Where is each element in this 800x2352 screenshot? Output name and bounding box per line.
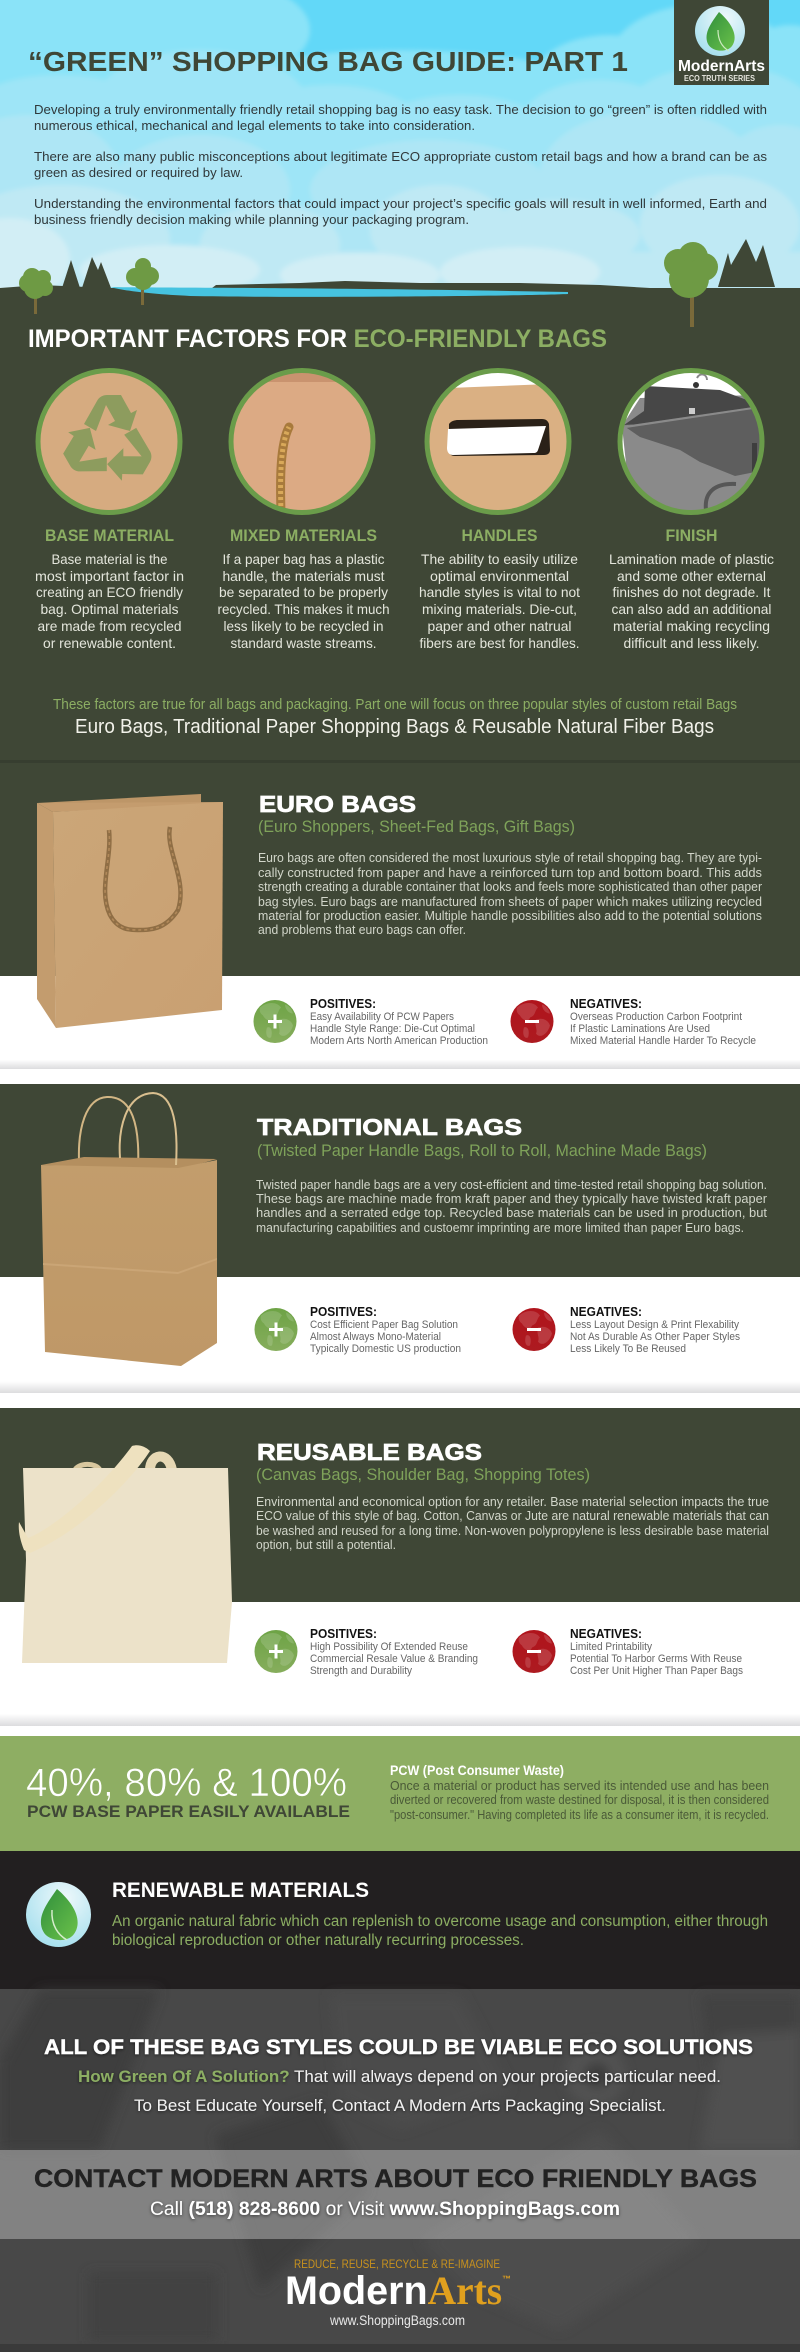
negatives list: Cost Per Unit Higher Than Paper Bags [570, 1665, 743, 1677]
PCW definition: diverted or recovered from waste destined for disposal, it is then considered [390, 1793, 769, 1807]
body text: recycled. This makes it much [218, 602, 390, 617]
positives list [310, 1627, 478, 1677]
body text: and problems that euro bags can offer. [258, 923, 466, 937]
body text: These bags are machine made from kraft paper and they typically have twisted kraft paper [256, 1192, 767, 1206]
contact band [0, 2150, 800, 2239]
body text: manufacturing capabilities and custoemr imprinting are more limited than paper Euro bags. [256, 1221, 744, 1235]
positives list: Commercial Resale Value & Branding [310, 1653, 478, 1665]
icon: rope handle on paper bag [234, 373, 370, 510]
negatives list: NEGATIVES: [570, 1627, 642, 1641]
negatives list: Mixed Material Handle Harder To Recycle [570, 1035, 756, 1047]
body text: If a paper bag has a plastic [222, 552, 385, 567]
subtitle: (Euro Shoppers, Sheet-Fed Bags, Gift Bags) [258, 817, 575, 836]
PCW definition [390, 1762, 769, 1822]
icon: leaf [26, 1882, 91, 1947]
negatives list: If Plastic Laminations Are Used [570, 1023, 710, 1035]
body text: bag. Optimal materials [40, 602, 179, 617]
negatives list: Less Layout Design & Print Flexability [570, 1319, 739, 1331]
body text: biological reproduction or other naturally recurring processes. [112, 1932, 524, 1949]
logo: Modern Arts wordmark: ™ [502, 2274, 511, 2284]
heading: important factors: IMPORTANT FACTORS FOR ECO-FRIENDLY BAGS [28, 325, 607, 353]
body text: bag styles. Euro bags are manufactured from sheets of paper which makes utilizing recycled [258, 895, 762, 909]
positives list: Handle Style Range: Die-Cut Optimal [310, 1023, 475, 1035]
positives list: Modern Arts North American Production [310, 1035, 488, 1047]
intro text: numerous ethical, mechanical and legal elements to take into consideration. [34, 118, 475, 133]
intro text: There are also many public misconceptions about legitimate ECO appropriate custom retail bags and how a brand can be as [34, 149, 768, 164]
heading: RENEWABLE MATERIALS [112, 1879, 369, 1902]
body text [35, 552, 184, 651]
panel: finish [609, 370, 774, 651]
panel: base material [35, 370, 184, 651]
panel: reusable bags [0, 1408, 800, 1726]
icon: positives globe [254, 1630, 298, 1673]
body text: material for production easier. Multiple handle possibilities also add to the potential solutions [258, 909, 762, 923]
heading: EURO BAGS [259, 791, 416, 817]
callout: viable eco solutions: How Green Of A Solution? That will always depend on your projects particular need. [78, 2067, 721, 2086]
positives list [310, 1305, 461, 1355]
positives list: POSITIVES: [310, 1305, 377, 1319]
footer logo block [285, 2257, 511, 2328]
body text: material making recycling [613, 619, 770, 634]
intro text [34, 102, 768, 227]
body text [258, 851, 762, 937]
logo badge: Modern Arts eco truth series: ModernArts [678, 58, 765, 75]
body text: handle, the materials must [222, 569, 385, 584]
heading: MIXED MATERIALS [230, 526, 377, 545]
icon: laminated bag finish [622, 373, 760, 510]
stat: PCW percentages: 40%, 80% & 100% [26, 1761, 347, 1805]
PCW definition: Once a material or product has served its intended use and has been [390, 1779, 769, 1793]
body text: strength creating a durable container that looks and feels more sophisticated than other paper [258, 880, 762, 894]
logo badge: Modern Arts eco truth series [674, 0, 769, 85]
negatives list [570, 997, 756, 1047]
positives list: POSITIVES: [310, 1627, 377, 1641]
icon: positives globe [254, 1308, 298, 1351]
body text: Base material is the [52, 552, 168, 567]
body text [609, 552, 774, 651]
body text: standard waste streams. [230, 636, 376, 651]
negatives list: NEGATIVES: [570, 1305, 642, 1319]
body text: or renewable content. [43, 636, 176, 651]
negatives list [570, 1627, 743, 1677]
heading: HANDLES [462, 526, 538, 545]
negatives list: Less Likely To Be Reused [570, 1343, 686, 1355]
panel: PCW post consumer waste [0, 1736, 800, 1851]
body text: handle styles is vital to not [419, 585, 580, 600]
subtitle: (Twisted Paper Handle Bags, Roll to Roll, Machine Made Bags) [257, 1141, 707, 1160]
panel: footer photo background [0, 1989, 800, 2352]
body text [419, 552, 580, 651]
callout: scope of part one: These factors are true for all bags and packaging. Part one will focus on three popular styles of custom retail Bags [53, 697, 737, 713]
panel: euro bags [0, 760, 800, 1069]
body text: be washed and reused for a long time. Non-woven polypropylene is less desirable base material [256, 1524, 769, 1538]
bottom strip [0, 2344, 800, 2352]
body text [256, 1178, 768, 1235]
body text [256, 1495, 769, 1552]
body text: An organic natural fabric which can replenish to overcome usage and consumption, either through [112, 1913, 768, 1930]
body text: cally constructed from paper and have a reinforced turn top and bottom board. This adds [258, 866, 762, 880]
body text [218, 552, 390, 651]
callout: viable eco solutions [44, 2036, 753, 2115]
body text: ECO value of this style of bag. Cotton, Canvas or Jute are natural renewable materials that can [256, 1509, 769, 1523]
body text: most important factor in [35, 569, 184, 584]
positives list: Easy Availability Of PCW Papers [310, 1011, 454, 1023]
negatives list: Potential To Harbor Germs With Reuse [570, 1653, 742, 1665]
positives list: High Possibility Of Extended Reuse [310, 1641, 468, 1653]
body text: finishes do not degrade. It [612, 585, 771, 600]
contact details: Call (518) 828-8600 or Visit www.ShoppingBags.com [150, 2199, 620, 2220]
body text: Lamination made of plastic [609, 552, 774, 567]
body text: fibers are best for handles. [420, 636, 580, 651]
icon: negatives globe [510, 1000, 554, 1043]
heading: REUSABLE BAGS [257, 1439, 482, 1465]
logo badge: Modern Arts eco truth series: ECO TRUTH SERIES [684, 74, 756, 83]
PCW definition: PCW (Post Consumer Waste) [390, 1762, 564, 1778]
body text: The ability to easily utilize [421, 552, 578, 567]
positives list: Cost Efficient Paper Bag Solution [310, 1319, 458, 1331]
body text: less likely to be recycled in [224, 619, 384, 634]
body text: be separated to be properly [219, 585, 388, 600]
positives list: POSITIVES: [310, 997, 376, 1011]
panel: renewable materials [0, 1851, 800, 1989]
heading: TRADITIONAL BAGS [257, 1114, 522, 1140]
intro text: green as desired or required by law. [34, 165, 243, 180]
website: www.ShoppingBags.com [329, 2313, 465, 2328]
body text: can also add an additional [612, 602, 772, 617]
body text: are made from recycled [38, 619, 182, 634]
callout: scope of part one: Euro Bags, Traditional Paper Shopping Bags & Reusable Natural Fiber Bags [75, 716, 714, 738]
positives list: Almost Always Mono-Material [310, 1331, 441, 1343]
negatives list: Not As Durable As Other Paper Styles [570, 1331, 740, 1343]
body text: and some other external [617, 569, 766, 584]
body text: optimal environmental [430, 569, 569, 584]
stat caption: PCW BASE PAPER EASILY AVAILABLE [27, 1802, 350, 1821]
title: “GREEN” SHOPPING BAG GUIDE: PART 1 [28, 46, 628, 77]
panel: traditional bags [0, 1084, 800, 1393]
body text: mixing materials. Die-cut, [422, 602, 577, 617]
icon: negatives globe [512, 1630, 556, 1673]
callout: scope of part one [53, 697, 737, 738]
callout: viable eco solutions: ALL OF THESE BAG STYLES COULD BE VIABLE ECO SOLUTIONS [44, 2036, 753, 2059]
intro text: Developing a truly environmentally friendly retail shopping bag is no easy task. The decision to go “green” is often riddled with [34, 102, 767, 117]
positives list: Strength and Durability [310, 1665, 412, 1677]
panel: sky header [0, 0, 800, 305]
body text: Environmental and economical option for any retailer. Base material selection impacts the true [256, 1495, 769, 1509]
subtitle: (Canvas Bags, Shoulder Bag, Shopping Totes) [256, 1465, 590, 1484]
negatives list: Limited Printability [570, 1641, 652, 1653]
body text: Euro bags are often considered the most luxurious style of retail shopping bag. They are typi- [258, 851, 762, 865]
euro bag illustration [37, 794, 223, 1028]
reusable tote bag illustration [19, 1445, 232, 1663]
callout: viable eco solutions: To Best Educate Yourself, Contact A Modern Arts Packaging Specialist. [134, 2096, 666, 2115]
body text: difficult and less likely. [624, 636, 760, 651]
heading: BASE MATERIAL [45, 526, 174, 545]
tagline: REDUCE, REUSE, RECYCLE & RE-IMAGINE [294, 2257, 500, 2271]
positives list: Typically Domestic US production [310, 1343, 461, 1355]
body text: creating an ECO friendly [36, 585, 183, 600]
body text: Twisted paper handle bags are a very cost-efficient and time-tested retail shopping bag solution. [256, 1178, 767, 1192]
negatives list: Overseas Production Carbon Footprint [570, 1011, 742, 1023]
panel: handles [419, 366, 580, 651]
heading: FINISH [666, 526, 718, 545]
body text: option, but still a potential. [256, 1538, 396, 1552]
body text: handles and a serrated edge top. Recycled base materials can be used in production, but [256, 1206, 768, 1220]
intro text: Understanding the environmental factors that could impact your project’s specific goals will result in well informed, Earth and [34, 196, 767, 211]
body text [112, 1913, 768, 1949]
icon: positives globe [254, 1000, 296, 1043]
intro text: business friendly decision making while planning your packaging program. [34, 212, 469, 227]
traditional bag illustration [41, 1093, 217, 1366]
icon: die-cut handle [430, 373, 566, 510]
logo: Modern Arts wordmark: ModernArts [285, 2268, 503, 2313]
body text: paper and other natrual [428, 619, 572, 634]
icon: negatives globe [512, 1308, 556, 1351]
landscape with trees and lake [0, 239, 800, 770]
panel: mixed materials [218, 366, 390, 651]
negatives list [570, 1305, 740, 1355]
icon: recycle symbol on kraft paper [38, 370, 180, 512]
contact heading: CONTACT MODERN ARTS ABOUT ECO FRIENDLY BAGS [34, 2165, 757, 2193]
negatives list: NEGATIVES: [570, 997, 642, 1011]
positives list [310, 997, 488, 1047]
